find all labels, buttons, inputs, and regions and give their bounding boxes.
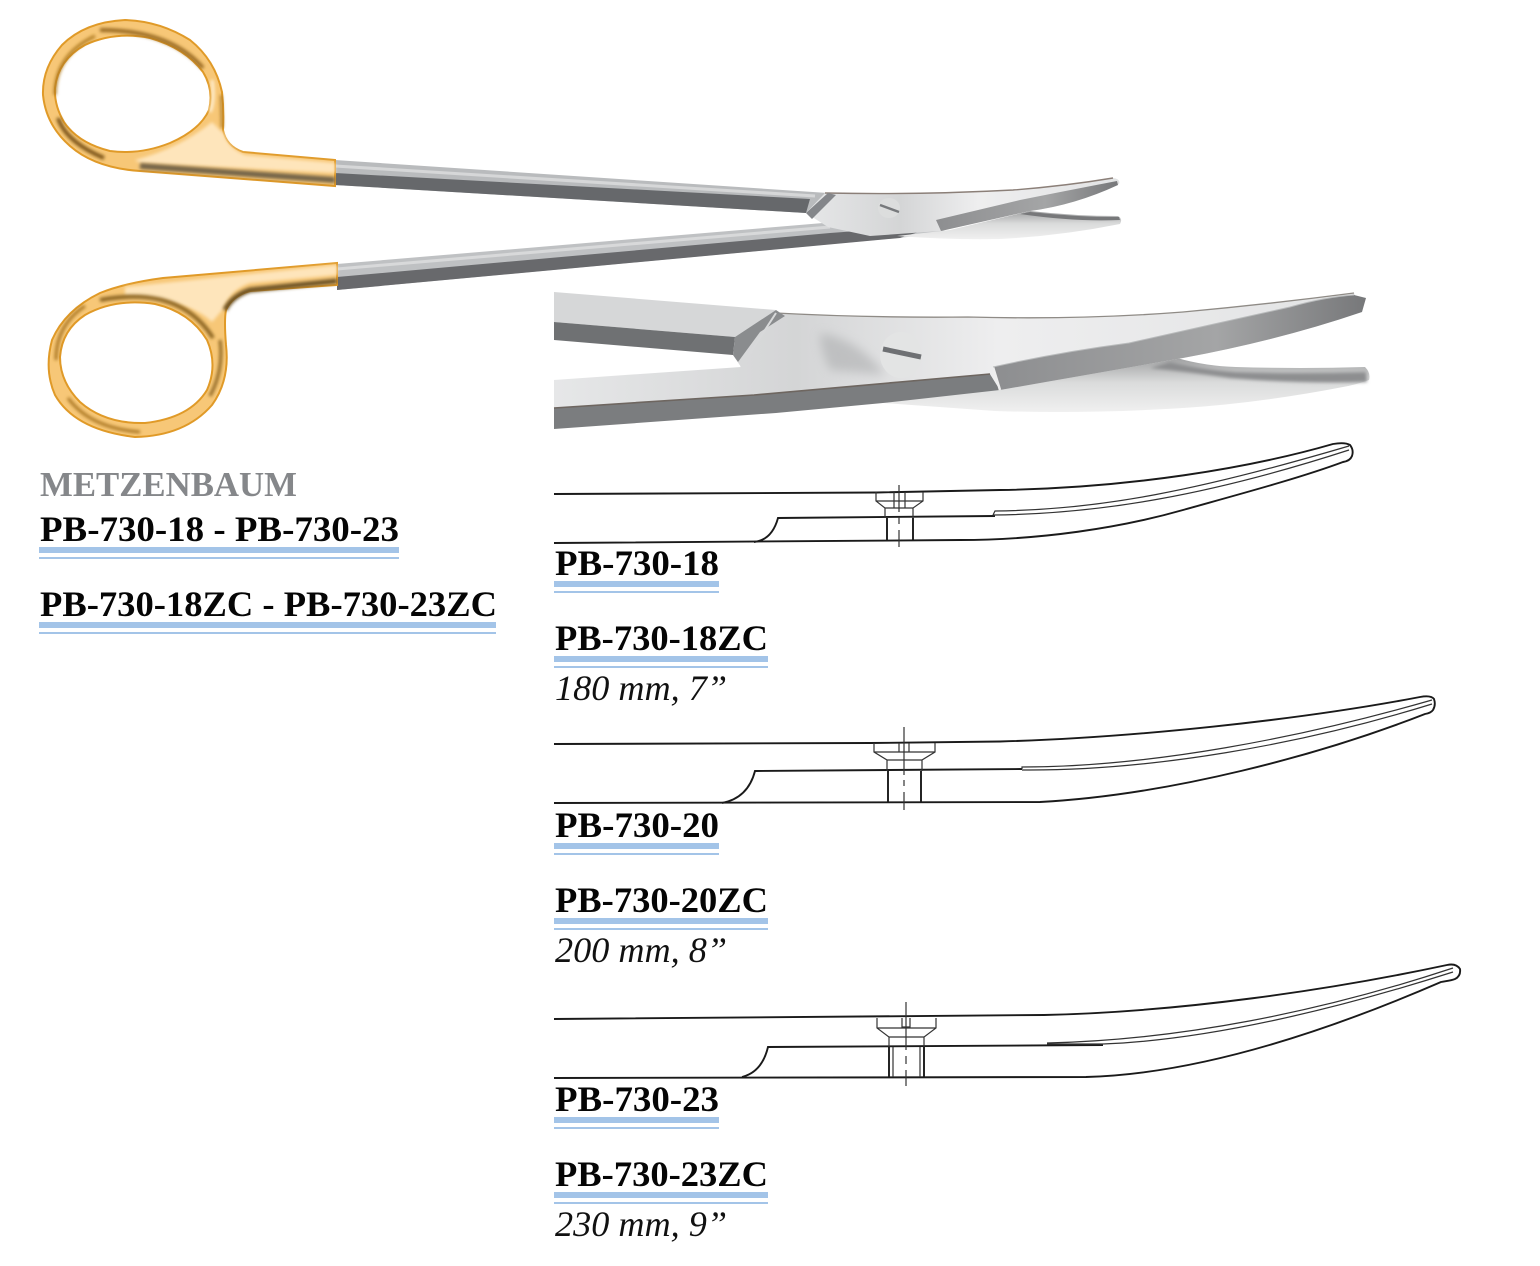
- photo: enlarged blade detail: [554, 292, 1370, 429]
- lower gold ring handle: [49, 263, 337, 437]
- lower blade: [883, 358, 1370, 412]
- upper blade: [806, 178, 1119, 236]
- label: PB-730-23: PB-730-23: [555, 1079, 719, 1119]
- code range: ZC: PB-730-18ZC - PB-730-23ZC: [40, 584, 497, 624]
- line drawing: 180 mm blade: [554, 443, 1353, 547]
- labels: 230 mm models: [554, 1079, 768, 1244]
- text block: product family: [39, 465, 497, 634]
- lower steel shaft: [337, 222, 960, 290]
- code range: standard: PB-730-18 - PB-730-23: [40, 509, 399, 549]
- label: PB-730-23ZC: PB-730-23ZC: [555, 1154, 768, 1194]
- line drawing: 200 mm blade: [554, 696, 1435, 810]
- pivot screw: [880, 332, 922, 378]
- size: 180 mm: 180 mm, 7”: [555, 668, 727, 708]
- label: PB-730-18ZC: PB-730-18ZC: [555, 618, 768, 658]
- lower blade tip: [897, 211, 1121, 239]
- upper gold ring handle: [43, 20, 335, 186]
- size: 200 mm: 200 mm, 8”: [555, 930, 727, 970]
- label: PB-730-20: PB-730-20: [555, 805, 719, 845]
- line drawing: 230 mm blade: [554, 964, 1460, 1086]
- central plate and upper blade: [554, 293, 1366, 408]
- photo: full gold-handled scissors: [43, 20, 1121, 437]
- labels: 200 mm models: [554, 805, 768, 970]
- upper shaft: [554, 292, 776, 355]
- size: 230 mm: 230 mm, 9”: [555, 1204, 727, 1244]
- heading: METZENBAUM: METZENBAUM: [40, 465, 297, 504]
- label: PB-730-20ZC: PB-730-20ZC: [555, 880, 768, 920]
- labels: 180 mm models: [554, 543, 768, 708]
- label: PB-730-18: PB-730-18: [555, 543, 719, 583]
- lower shaft dark edge: [554, 374, 1000, 429]
- upper steel shaft: [335, 160, 828, 213]
- pivot screw: [878, 198, 900, 218]
